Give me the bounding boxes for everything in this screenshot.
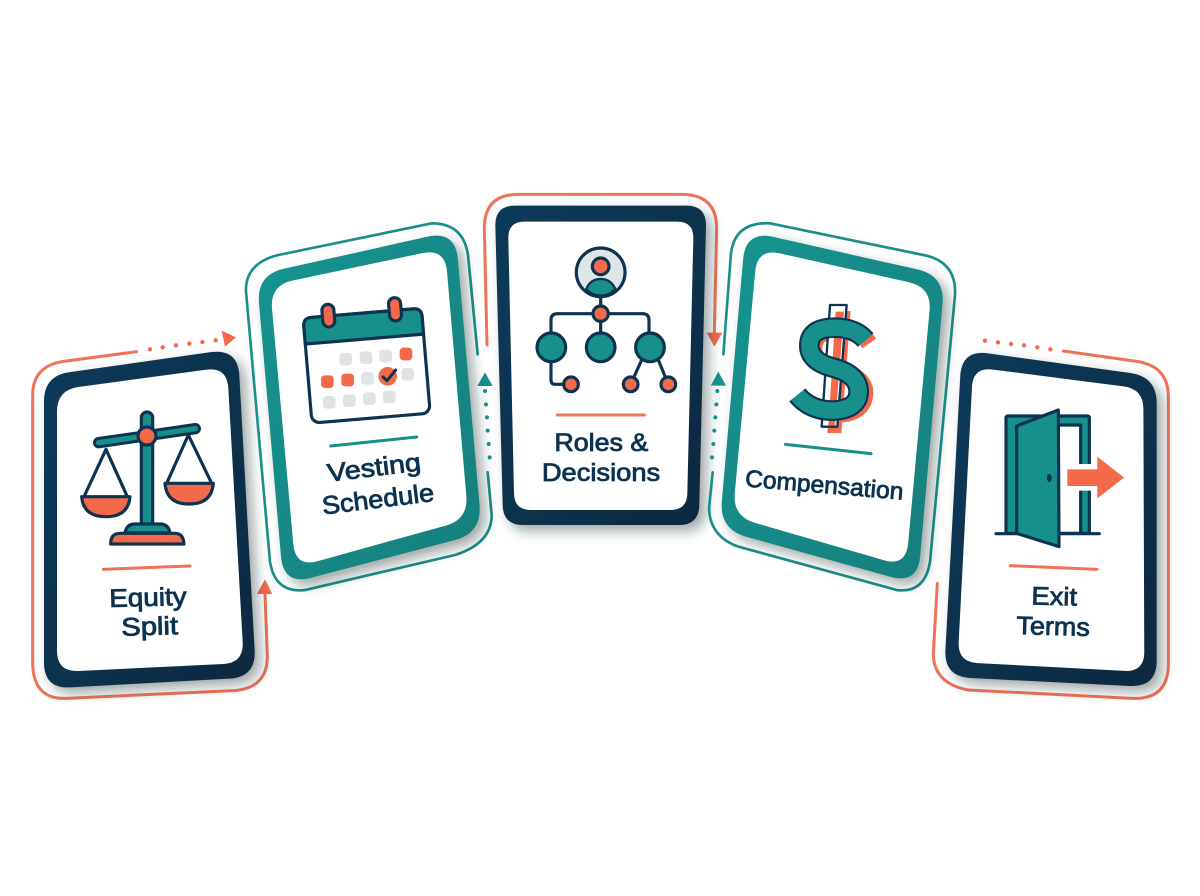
connector: teal outline with dotted arrow [709, 223, 955, 590]
card: Vesting Schedule [246, 223, 493, 590]
card frame [259, 236, 480, 579]
card face [508, 222, 693, 510]
card: Exit Terms [933, 338, 1168, 698]
icon: calendar [303, 297, 430, 423]
card face [735, 253, 930, 562]
label: Equity Split: Equity [109, 583, 187, 613]
card face [959, 369, 1144, 671]
connector: orange outline with arrow [33, 331, 272, 698]
label: Vesting Schedule [320, 448, 436, 520]
label: Exit Terms: Terms [1016, 612, 1090, 642]
divider [331, 437, 417, 446]
divider [103, 566, 190, 569]
card: Compensation [709, 223, 955, 590]
divider [557, 410, 644, 419]
label: Vesting Schedule: Schedule [320, 479, 436, 520]
icon: organisation chart [537, 248, 676, 392]
label: Equity Split: Split [121, 612, 178, 642]
card frame [495, 206, 706, 525]
connector: teal outline with dotted arrow [246, 223, 493, 590]
label: Roles and Decisions: Roles & [554, 429, 648, 457]
card: Roles and Decisions [484, 194, 722, 525]
icon: open door with arrow [996, 410, 1124, 547]
divider [1010, 566, 1097, 569]
icon: balance scale [82, 412, 213, 544]
card face [57, 369, 243, 671]
card frame [945, 353, 1157, 686]
card: Equity Split [33, 331, 272, 698]
label: Roles and Decisions [542, 429, 660, 487]
connector: orange outline with dots [933, 338, 1168, 698]
label: Vesting Schedule: Vesting [326, 448, 422, 488]
card face [272, 252, 466, 562]
connector: orange outline with arrow [484, 194, 722, 347]
label: Compensation: Compensation [744, 465, 904, 506]
icon: dollar sign [797, 305, 869, 433]
label: Roles and Decisions: Decisions [542, 459, 660, 487]
label: Exit Terms: Exit [1031, 582, 1077, 612]
card frame [44, 352, 255, 687]
divider [785, 444, 871, 454]
label: Equity Split [109, 583, 188, 642]
label: Exit Terms [1016, 582, 1091, 642]
card frame [722, 236, 943, 578]
